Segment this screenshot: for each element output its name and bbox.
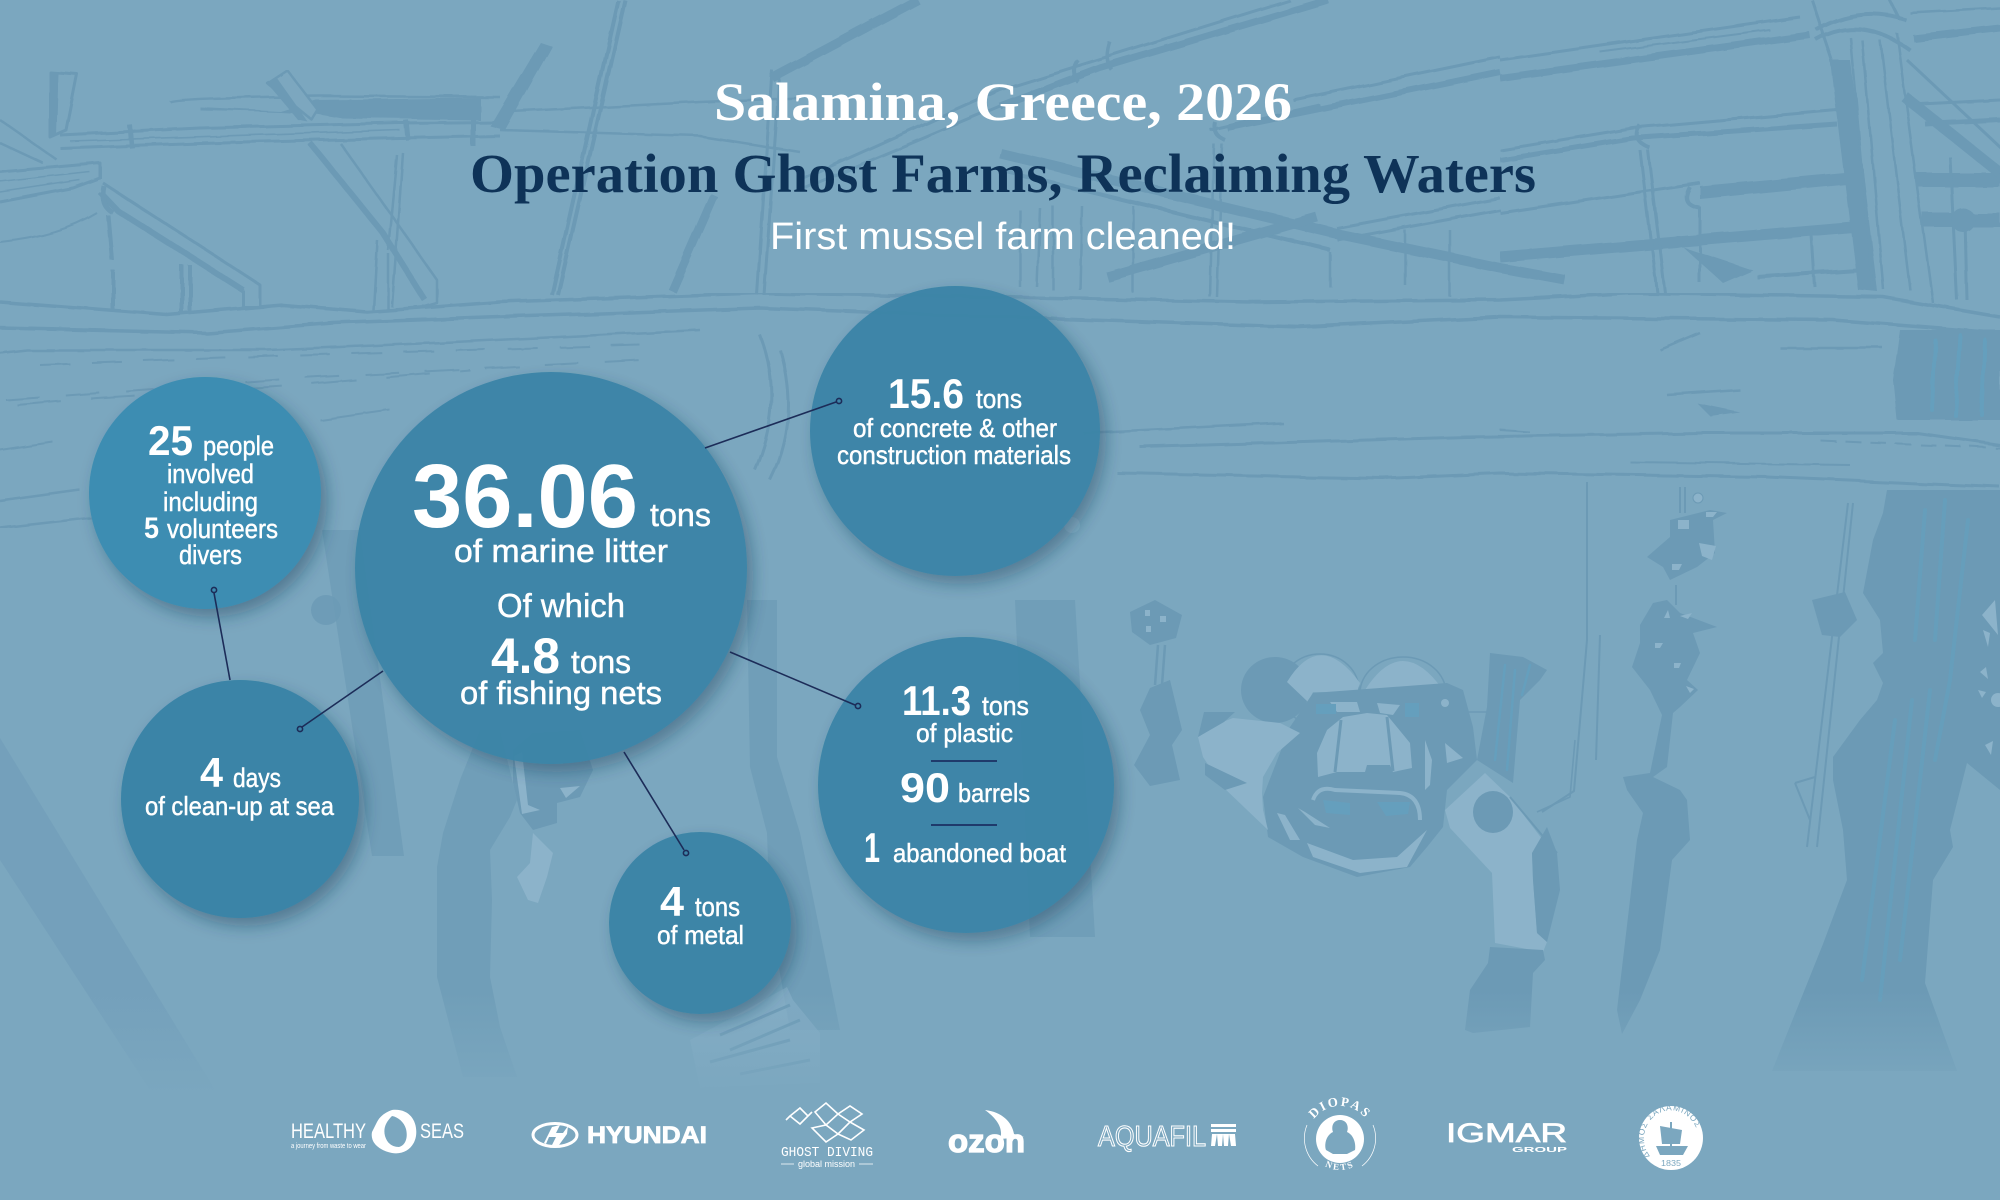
logo: Ghost Diving — [781, 1103, 873, 1169]
label: concrete and construction materials — [837, 413, 1071, 470]
logo: Igmar Group — [1446, 1118, 1567, 1154]
farm structure: left raft poles — [0, 70, 500, 312]
figure: 4 tons — [660, 878, 740, 925]
text: people involved including volunteers divers: involved — [167, 459, 254, 489]
panel: plastic, barrels and boat circle — [818, 637, 1114, 933]
text: people involved including volunteers divers — [144, 431, 278, 570]
logo: Municipality of Salamina seal: ΔΗΜΟΣ ΣΑΛΑΜΙΝΟΣ — [1639, 1106, 1699, 1157]
partner logos row — [291, 1097, 1703, 1170]
farm structure: main horizontal float — [0, 293, 2000, 528]
logo: Ghost Diving: GHOST DIVING — [781, 1145, 873, 1161]
figure: 90 barrels: barrels — [958, 778, 1030, 808]
figure: 25 people: 25 — [148, 417, 193, 464]
figure: 11.3 tons of plastic: of plastic — [916, 718, 1013, 748]
label: concrete and construction materials: of concrete & other — [853, 413, 1057, 443]
label: of fishing nets: of fishing nets — [460, 675, 662, 711]
figure: 1 abandoned boat — [864, 824, 1067, 871]
panel: metal circle — [609, 832, 791, 1014]
figure: 4 days — [200, 749, 281, 796]
connector lines between circles — [211, 398, 861, 856]
figure: 90 barrels — [900, 764, 1030, 811]
mussel ropes and posts: right — [1542, 482, 2000, 1071]
label: concrete and construction materials: construction materials — [837, 440, 1071, 470]
panel: people circle — [89, 377, 321, 609]
logo: Ozon: ozon — [948, 1123, 1025, 1159]
logo: Hyundai: HYUNDAI — [587, 1122, 707, 1149]
label: of which: Of which — [497, 587, 625, 624]
figure: 4 days: 4 — [200, 749, 224, 796]
figure: 11.3 tons of plastic — [902, 677, 1029, 748]
title: operation name: Operation Ghost Farms, Reclaiming Waters — [470, 143, 1536, 204]
figure: 90 barrels: 90 — [900, 764, 950, 811]
text: people involved including volunteers divers: divers — [179, 540, 242, 570]
panel: main marine litter circle — [355, 372, 747, 764]
text: people involved including volunteers divers: volunteers — [167, 514, 278, 544]
panel: concrete circle — [810, 286, 1100, 576]
figure: 15.6 tons: 15.6 — [888, 370, 964, 417]
unit: tons: tons — [650, 497, 711, 533]
label: of metal: of metal — [657, 920, 744, 950]
text: people involved including volunteers divers: 5 — [144, 512, 159, 545]
diver silhouette — [1198, 653, 1575, 1033]
logo: Aquafil: AQUAFIL — [1098, 1121, 1206, 1153]
figure: 1 abandoned boat: 1 — [864, 824, 880, 871]
logo: Diopas Nets: DIOPAS — [1308, 1097, 1370, 1119]
main total figure: 36.06 — [412, 447, 638, 547]
title: location and year: Salamina, Greece, 2026 — [714, 72, 1292, 132]
logo: Hyundai — [533, 1122, 707, 1149]
unit: tons of concrete: tons — [976, 384, 1022, 414]
unit: tons of nets: tons — [571, 644, 631, 680]
figure: fishing nets tons: 4.8 — [491, 628, 560, 684]
logo: Ghost Diving: global mission — [798, 1159, 855, 1169]
figure: 4 tons: tons — [695, 892, 740, 922]
logo: Igmar Group: IGMAR — [1446, 1118, 1567, 1148]
logo: Healthy Seas: SEAS — [420, 1120, 464, 1143]
logo: Healthy Seas: HEALTHY — [291, 1120, 366, 1143]
logo: Healthy Seas — [291, 1110, 464, 1153]
logo: Municipality of Salamina seal: 1835 — [1661, 1159, 1682, 1168]
logo: Igmar Group: GROUP — [1512, 1145, 1567, 1154]
label: of marine litter: of marine litter — [454, 533, 668, 569]
title block — [470, 72, 1536, 258]
logo: Healthy Seas: a journey from waste to wear — [291, 1143, 367, 1150]
farm structure: centre beams — [490, 0, 1565, 297]
mussel ropes and posts: left — [0, 517, 1182, 1090]
subtitle: First mussel farm cleaned! — [770, 216, 1236, 258]
figure: 4 days: days — [233, 763, 281, 793]
farm structure: right pole and beams — [1500, 0, 2000, 303]
bottom fade of the illustration — [0, 990, 2000, 1095]
logo: Diopas Nets: NETS — [1324, 1160, 1352, 1170]
label: of clean-up at sea: of clean-up at sea — [145, 791, 334, 821]
text: people involved including volunteers divers: including — [163, 487, 258, 517]
figure: 11.3 tons of plastic: 11.3 — [902, 677, 971, 724]
text: people involved including volunteers divers: people — [203, 431, 274, 461]
logo: Diopas Nets — [1304, 1097, 1376, 1170]
figure: 1 abandoned boat: abandoned boat — [893, 838, 1067, 868]
figure: 11.3 tons of plastic: tons — [982, 691, 1029, 721]
figure: 4 tons: 4 — [660, 878, 685, 925]
panel: days at sea circle — [121, 680, 359, 918]
